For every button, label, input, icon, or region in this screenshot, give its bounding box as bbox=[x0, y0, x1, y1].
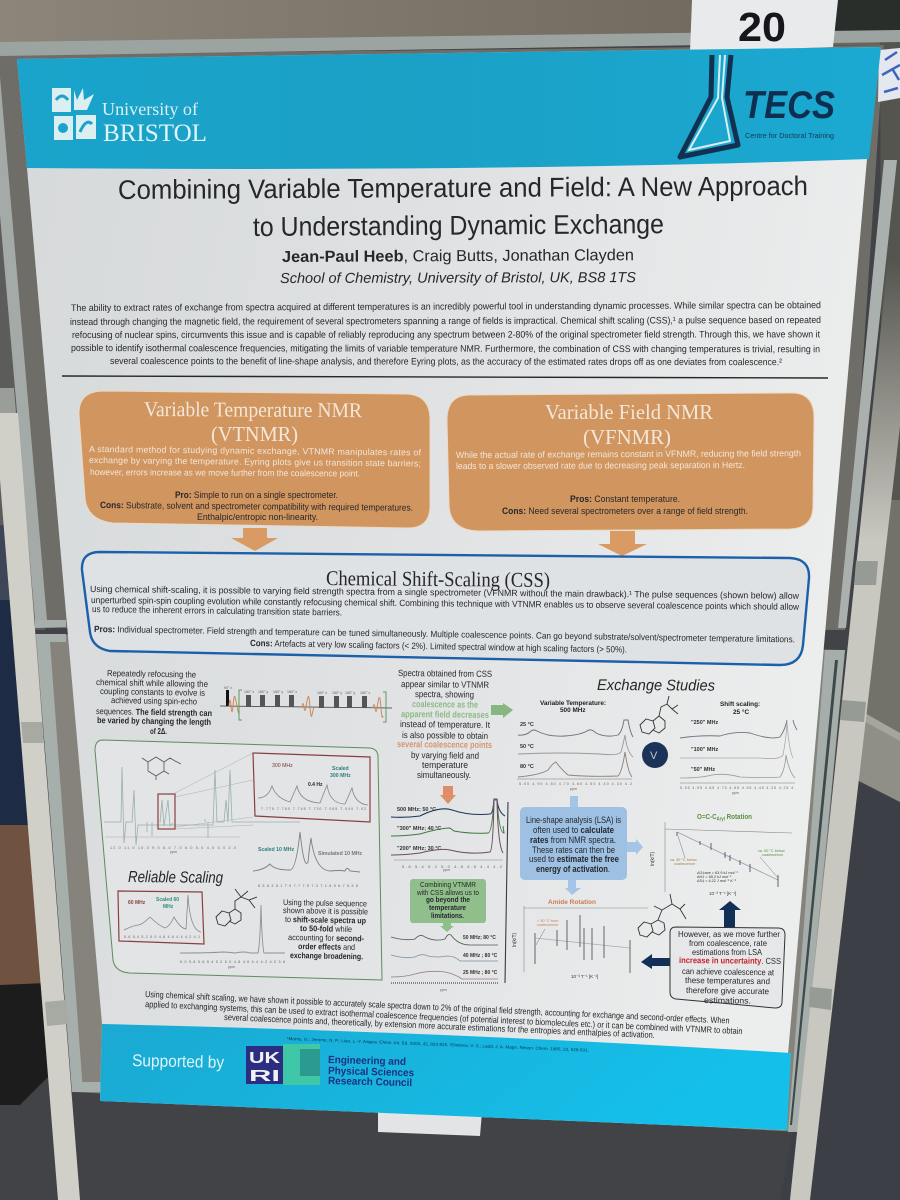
UKRI logo: RI bbox=[249, 1068, 280, 1085]
spectra: variable temperature: 50 °C bbox=[520, 744, 534, 750]
chart: O=C-C aryl rotation: ΔG‡ave = 63.9 kJ mol⁻¹ bbox=[697, 871, 738, 875]
left pole bbox=[0, 388, 80, 1200]
spectra: shift scaling: "250" MHz bbox=[691, 720, 718, 726]
callout: uncertainty: can achieve coalescence at bbox=[682, 966, 775, 977]
number card: 20 bbox=[738, 4, 786, 50]
abstract bbox=[70, 300, 821, 368]
abstract: The ability to extract rates of exchange from spectra acquired at different temperatures is an incredibly powerful tool in understanding dynamic processes. While similar spectra can be obtained bbox=[71, 300, 821, 314]
spectrum: bottom: 6.0 5.8 5.6 5.4 5.2 5.0 4.8 4.6 4.4 4.2 4.0 3.8 bbox=[180, 960, 285, 964]
spectra stack: lower field: 40 MHz ; 80 °C bbox=[463, 953, 498, 959]
arrow: orange down bbox=[440, 786, 456, 804]
spectra stack: lower field: 25 MHz ; 80 °C bbox=[463, 970, 498, 976]
chart: O=C-C aryl rotation: Rotation bbox=[725, 812, 752, 821]
spectra stack: combined conditions: 500 MHz; 50 °C bbox=[397, 807, 436, 813]
chart: amide rotation: coalescence bbox=[537, 923, 558, 927]
heading: reliable scaling: Reliable Scaling bbox=[128, 869, 223, 887]
callout: uncertainty bbox=[670, 927, 785, 1008]
text: spectra description: Spectra obtained from CSS bbox=[398, 668, 492, 679]
number card bbox=[690, 0, 838, 52]
panel: chemical shift-scaling: Using chemical shift-scaling, it is possible to varying field strength spectra from a single spectrometer (VFNMR without the main drawback).¹ The pulse sequences (shown below) allow bbox=[90, 584, 800, 601]
callout: line-shape analysis: often used to calculate bbox=[533, 825, 614, 835]
panel: variable temperature NMR: Pro: Simple to run on a single spectrometer. bbox=[175, 490, 338, 500]
panel: variable temperature NMR: Variable Temperature NMR bbox=[144, 397, 362, 422]
panel: variable temperature NMR: A standard method for studying dynamic exchange, VTNMR manipulates rates of bbox=[89, 444, 422, 457]
panel: reliable scaling: 12.0 11.0 10.0 9.0 8.0 7.0 6.0 5.0 4.0 3.0 2.0 bbox=[110, 846, 236, 850]
right pole bbox=[790, 260, 900, 1200]
text: shift-scale description: to shift-scale spectra up bbox=[285, 915, 366, 925]
chart: O=C-C aryl rotation: ca. 50 °C below bbox=[758, 849, 785, 853]
icon: dark V badge: V bbox=[650, 750, 658, 762]
panel: variable temperature NMR: however, errors increase as we move further from the coalescence point. bbox=[90, 467, 360, 478]
sticky note with blue scribble bbox=[878, 48, 900, 102]
pulse sequence diagram: 180° y bbox=[345, 691, 355, 695]
spectra: shift scaling: ppm bbox=[732, 791, 739, 795]
spectrum: scaled 10 MHz: Simulated 10 MHz bbox=[318, 851, 363, 857]
spectra stack: combined conditions: "300" MHz; 40 °C bbox=[397, 826, 441, 832]
heading: exchange studies: Exchange Studies bbox=[597, 677, 715, 695]
inset: 300 MHz zoom: 0.4 Hz bbox=[308, 782, 323, 788]
spectra stack: combined conditions: "200" MHz; 30 °C bbox=[397, 846, 441, 852]
spectra: variable temperature: 500 MHz bbox=[560, 707, 586, 714]
callout: uncertainty: However, as we move further bbox=[678, 929, 780, 939]
pulse sequence diagram: 90° x bbox=[224, 686, 232, 690]
arrow: LSA to rotation plot bbox=[627, 839, 643, 855]
text: spectra description: instead of temperature. It bbox=[400, 719, 491, 730]
text: shift-scale description bbox=[283, 898, 369, 961]
chart: O=C-C aryl rotation: O=C-C bbox=[697, 812, 720, 821]
panel: chemical shift-scaling: Pros: Individual spectrometer. Field strength and temperature can be tuned simultaneously. Multiple coalescence points. Can go beyond substrate/solvent/spectrometer temperature limitations. bbox=[94, 624, 795, 644]
crest bbox=[52, 88, 96, 140]
panel: variable field NMR: (VFNMR) bbox=[583, 425, 671, 449]
callout: uncertainty: increase in uncertainty. CSS bbox=[679, 955, 781, 966]
text: spectra description: is also possible to obtain bbox=[402, 730, 488, 741]
pulse sequence diagram: 180° y bbox=[273, 690, 283, 694]
title: to Understanding Dynamic Exchange bbox=[253, 209, 664, 242]
text: shift-scale description: exchange broadening. bbox=[290, 951, 363, 961]
text: spectra description: by varying field and bbox=[411, 750, 479, 761]
affiliation: School of Chemistry, University of Bristol, UK, BS8 1TS bbox=[280, 270, 636, 287]
spectra stack: lower field bbox=[391, 934, 499, 992]
callout: beyond temperature limitations: temperature bbox=[429, 905, 466, 912]
callout: line-shape analysis: used to estimate the free bbox=[529, 854, 619, 864]
panel: variable temperature NMR: Enthalpic/entropic non-linearity. bbox=[197, 512, 318, 522]
arrow: dark up to rotation plot bbox=[719, 901, 741, 928]
spectra: variable temperature: Variable Temperature: bbox=[540, 700, 606, 707]
spectra: variable temperature: ppm bbox=[570, 787, 577, 791]
pulse sequence diagram: 180° x bbox=[317, 691, 327, 695]
text: shift-scale description: order effects and bbox=[298, 942, 355, 952]
TECS logo: Centre for Doctoral Training bbox=[745, 131, 834, 140]
callout: uncertainty: estimations. bbox=[704, 995, 751, 1006]
paper slip under poster bbox=[378, 1108, 482, 1136]
text: spectra description: apparent field decreases bbox=[401, 709, 489, 720]
text: spectra description bbox=[397, 668, 492, 780]
EPSRC text: Physical Sciences bbox=[328, 1065, 414, 1079]
pulse sequence diagram: 180° x bbox=[360, 691, 370, 695]
callout: line-shape analysis: Line-shape analysis (LSA) is bbox=[526, 815, 621, 825]
text: refocusing description: Repeatedly refocusing the bbox=[107, 668, 196, 680]
references: ¹Morris, G.; Jerome, N. P.; Lian, L.-Y. Angew. Chem. Int. Ed. 2003, 42, 823-825. ²Dimitrov, V. S.; Ladd, J. A. Magn. Reson. Chem. 1985, 23, 529-531. bbox=[287, 1036, 589, 1053]
chart: O=C-C aryl rotation: 10⁻³ T⁻¹ [K⁻¹] bbox=[709, 891, 736, 896]
conclusion: applied to exchanging systems, this can be used to extract isothermal coalescence frequencies (of potential interest to biomolecules etc.) or it can be combined with VTNMR to obtain bbox=[145, 999, 743, 1036]
spectrum: bottom bbox=[180, 905, 285, 969]
chart: amide rotation: 10⁻³ T⁻¹ [K⁻¹] bbox=[571, 974, 598, 979]
text: refocusing description bbox=[96, 668, 212, 736]
callout: line-shape analysis: These rates can then be bbox=[532, 845, 615, 855]
panel: variable temperature NMR bbox=[79, 391, 430, 528]
panel: reliable scaling: ppm bbox=[170, 850, 177, 854]
chart: O=C-C aryl rotation bbox=[650, 812, 792, 896]
spectra: variable temperature bbox=[517, 700, 633, 791]
text: shift-scale description: shown above it is possible bbox=[283, 906, 369, 916]
chart: amide rotation: > 30 °C from bbox=[537, 919, 558, 923]
TECS logo: TECS bbox=[743, 84, 835, 127]
header band bbox=[17, 47, 881, 169]
chart: amide rotation bbox=[512, 899, 648, 979]
spectra: shift scaling: "50" MHz bbox=[691, 767, 715, 773]
callout: beyond temperature limitations: go beyond the bbox=[426, 897, 470, 904]
inset: 60 MHz: 60 MHz bbox=[128, 900, 146, 906]
text: shift-scale description: accounting for second- bbox=[288, 933, 364, 943]
text: refocusing description: of 2Δ. bbox=[150, 726, 167, 736]
inset: 60 MHz: 5.6 5.4 5.2 5.0 4.8 4.6 4.4 4.2 4.1 bbox=[124, 935, 200, 939]
callout: uncertainty: therefore give accurate bbox=[686, 985, 769, 996]
inset: 60 MHz bbox=[118, 891, 204, 944]
spectra stack: combined conditions: ppm bbox=[443, 868, 450, 872]
arrow: green to exchange studies bbox=[491, 703, 513, 718]
panel: variable field NMR: Cons: Need several spectrometers over a range of field strength. bbox=[502, 506, 748, 516]
chart: amide rotation: ln(k/T) bbox=[512, 932, 518, 947]
text: refocusing description: sequences. The field strength can bbox=[96, 706, 212, 718]
spectrum: overview bbox=[104, 753, 300, 845]
panel: variable field NMR bbox=[447, 393, 814, 531]
text: spectra description: simultaneously. bbox=[417, 770, 471, 780]
chart: O=C-C aryl rotation: ca. 30 °C below bbox=[670, 858, 697, 862]
callout: uncertainty: estimations from LSA bbox=[692, 947, 762, 957]
inset: 300 MHz zoom: Scaled bbox=[332, 766, 349, 772]
spectra: shift scaling bbox=[680, 701, 797, 795]
chart: O=C-C aryl rotation: coalescence bbox=[762, 853, 783, 857]
arrow: green down bbox=[440, 923, 454, 932]
authors: Jean-Paul Heeb, Craig Butts, Jonathan Clayden bbox=[282, 247, 634, 266]
callout: line-shape analysis: energy of activation. bbox=[536, 864, 610, 874]
panel: variable temperature NMR: exchange by varying the temperature. Eyring plots give us transition state barriers; bbox=[89, 455, 421, 468]
chart: O=C-C aryl rotation: ΔH‡ = 65.2 kJ mol⁻¹ bbox=[697, 875, 732, 879]
icon: dark V badge bbox=[642, 742, 668, 768]
spectra stack: lower field: 50 MHz; 80 °C bbox=[463, 935, 496, 941]
title: Combining Variable Temperature and Field: A New Approach bbox=[118, 171, 808, 205]
abstract: refocusing of nuclear spins, circumvents this issue and is capable of reliably reproducing any spectrum between 2-80% of the original spectrometer field strength. Through this, we have shown it bbox=[72, 329, 820, 341]
panel: variable field NMR: Variable Field NMR bbox=[545, 400, 713, 424]
spectra: shift scaling: 5.05 4.95 4.85 4.75 4.65 4.55 4.45 4.35 4.25 4. bbox=[680, 786, 795, 790]
text: refocusing description: achieved using spin-echo bbox=[111, 695, 197, 707]
inset: 300 MHz zoom: 7.775 7.760 7.745 7.730 7.055 7.040 7.02 bbox=[261, 807, 366, 811]
inset: 60 MHz: MHz bbox=[163, 904, 174, 910]
spectra: shift scaling: Shift scaling: bbox=[720, 701, 760, 708]
chart: O=C-C aryl rotation: ΔS‡ = 4.22 J mol⁻¹ K⁻¹ bbox=[697, 879, 737, 883]
callout: beyond temperature limitations: with CSS allows us to bbox=[416, 890, 479, 897]
TECS logo bbox=[680, 55, 835, 157]
spectrum: scaled 10 MHz: 8.5 8.3 8.1 7.9 7.7 7.5 7.3 7.1 6.9 6.7 6.5 6 bbox=[258, 884, 358, 888]
panel: chemical shift-scaling: unperturbed spin-spin coupling evolution while constantly refocusing chemical shift. Combining this technique with VTNMR enables us to observe several coalescence points which should allow bbox=[91, 595, 799, 612]
EPSRC text bbox=[328, 1054, 414, 1089]
panel: chemical shift-scaling: Chemical Shift-Scaling (CSS) bbox=[326, 566, 550, 592]
panel: chemical shift-scaling: Cons: Artefacts at very low scaling factors (< 2%). Limited spectral window at high scaling factors (> 50%). bbox=[250, 638, 627, 655]
text: refocusing description: coupling constants to evolve is bbox=[100, 686, 205, 698]
pulse sequence diagram bbox=[220, 686, 392, 722]
EPSRC text: Research Council bbox=[328, 1075, 412, 1089]
spectra: variable temperature: 80 °C bbox=[520, 764, 534, 770]
panel: chemical shift-scaling bbox=[82, 552, 809, 665]
spectra: shift scaling: "100" MHz bbox=[691, 747, 718, 753]
text: spectra description: spectra, showing bbox=[415, 689, 474, 700]
icon: flask bbox=[680, 55, 738, 157]
text: shift-scale description: to 50-fold while bbox=[300, 924, 353, 934]
arrow: VTNMR to CSS bbox=[231, 528, 278, 551]
icon: amide molecule with highlight bbox=[638, 894, 686, 937]
abstract: possible to identify isothermal coalescence frequencies, mitigating the limits of variable temperature NMR. Furthermore, the combination of CSS with changing temperatures is trivial, resulting in bbox=[71, 343, 820, 355]
text: spectra description: temperature bbox=[422, 760, 468, 770]
spectra stack: combined conditions: 5.6 5.4 5.2 5.0 4.8 4.6 4.4 4.2 bbox=[402, 864, 503, 869]
University of Bristol logo: University of bbox=[102, 99, 198, 119]
University of Bristol logo: BRISTOL bbox=[103, 120, 207, 147]
pulse sequence diagram: 180° y bbox=[258, 690, 268, 694]
panel: variable field NMR: Pros: Constant temperature. bbox=[570, 494, 680, 504]
panel: variable field NMR: leads to a slower observed rate due to decreasing peak separation in Hertz. bbox=[456, 460, 745, 471]
spectra: variable temperature: 5.00 4.90 4.80 4.70 4.60 4.50 4.40 4.30 4.2 bbox=[519, 782, 632, 786]
icon: pyrimidine molecule bbox=[142, 757, 181, 780]
callout: beyond temperature limitations: limitations. bbox=[431, 913, 464, 920]
spectrum: bottom: ppm bbox=[228, 965, 235, 969]
chart: O=C-C aryl rotation: ln(k/T) bbox=[650, 852, 656, 866]
spectra stack: combined conditions bbox=[391, 799, 505, 872]
text: spectra description: appear similar to VTNMR bbox=[401, 679, 490, 690]
title bbox=[118, 171, 808, 242]
spectrum: scaled 10 MHz: Scaled 10 MHz bbox=[258, 847, 294, 853]
abstract: instead through changing the magnetic field, the requirement of several spectrometers spanning a range of fields is impractical. Chemical shift scaling (CSS),¹ a pulse sequence based on repeated bbox=[70, 315, 821, 328]
arrow: dark left to amide plot bbox=[641, 954, 671, 969]
icon: amide molecule bbox=[640, 696, 678, 734]
person standing behind the board bbox=[0, 525, 50, 1105]
panel: variable field NMR: While the actual rate of exchange remains constant in VFNMR, reducing the field strength bbox=[456, 448, 801, 460]
panel: variable temperature NMR: (VTNMR) bbox=[211, 422, 298, 446]
University of Bristol logo bbox=[52, 88, 207, 147]
callout: line-shape analysis: rates from NMR spectra. bbox=[530, 835, 616, 845]
text: spectra description: several coalescence points bbox=[397, 739, 492, 750]
conclusion: several coalescence points and, theoretically, by extension more accurate estimations for the entropies and enthalpies of activation. bbox=[224, 1012, 655, 1040]
callout: beyond temperature limitations: Combining VTNMR bbox=[420, 882, 476, 889]
UKRI logo: UK bbox=[249, 1050, 281, 1067]
inset: 60 MHz: Scaled 60 bbox=[156, 897, 179, 903]
callout: beyond temperature limitations bbox=[410, 879, 486, 923]
chart: O=C-C aryl rotation: coalescence bbox=[674, 862, 695, 866]
spectra stack: lower field: ppm bbox=[440, 988, 447, 992]
arrow: VFNMR to CSS bbox=[598, 531, 647, 556]
EPSRC text: Engineering and bbox=[328, 1054, 406, 1068]
callout: uncertainty: from coalescence, rate bbox=[689, 938, 767, 948]
chart: O=C-C aryl rotation: Aryl bbox=[717, 816, 725, 822]
UKRI logo bbox=[246, 1044, 320, 1085]
supported by: Supported by bbox=[132, 1051, 225, 1072]
inset: 300 MHz zoom bbox=[253, 753, 370, 822]
pulse sequence diagram: 180° x bbox=[287, 690, 297, 694]
spectra: shift scaling: 25 °C bbox=[733, 708, 749, 716]
conclusion: Using chemical shift scaling, we have shown it possible to accurately scale spectra down to 2% of the original field strength, accounting for exchange and second-order effects. When bbox=[145, 989, 730, 1026]
text: spectra description: coalescence as the bbox=[412, 699, 478, 710]
abstract: several coalescence points to the benefit of line-shape analysis, and therefore Eyring plots, as the accuracy of the estimated rates drops off as one deviates from coalescence.² bbox=[110, 356, 782, 368]
inset: 300 MHz zoom: 300 MHz bbox=[272, 763, 293, 769]
inset: 300 MHz zoom: 300 MHz bbox=[330, 773, 351, 779]
callout: uncertainty: these temperatures and bbox=[685, 975, 770, 986]
footer band bbox=[100, 1024, 791, 1130]
pulse sequence diagram: 180° y bbox=[332, 691, 342, 695]
icon: naphthyl molecule bbox=[216, 889, 257, 926]
spectra: variable temperature: 25 °C bbox=[520, 722, 534, 728]
arrow: light blue into LSA box bbox=[570, 796, 578, 807]
text: shift-scale description: Using the pulse sequence bbox=[283, 898, 367, 908]
chart: amide rotation: Amide Rotation bbox=[548, 899, 596, 906]
text: refocusing description: chemical shift while allowing the bbox=[96, 677, 208, 689]
text: refocusing description: be varied by changing the length bbox=[97, 715, 211, 727]
pulse sequence diagram: 180° x bbox=[244, 690, 254, 694]
callout: line-shape analysis bbox=[520, 807, 627, 880]
panel: reliable scaling bbox=[95, 740, 382, 980]
spectrum: scaled 10 MHz bbox=[253, 832, 363, 888]
arrow: LSA to amide plot bbox=[565, 880, 581, 895]
panel: chemical shift-scaling: us to reduce the inherent errors in calculating transition state barriers. bbox=[92, 604, 342, 617]
panel: variable temperature NMR: Cons: Substrate, solvent and spectrometer compatibility with required temperatures. bbox=[100, 500, 413, 513]
